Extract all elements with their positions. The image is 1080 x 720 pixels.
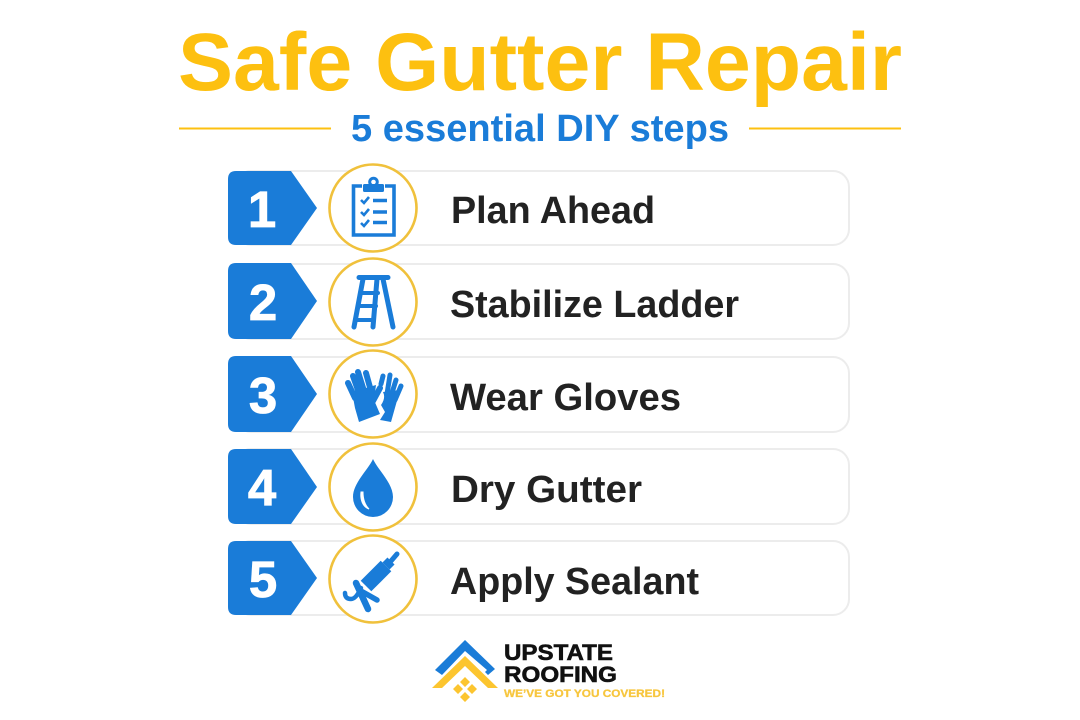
label: Apply Sealant <box>450 561 699 603</box>
step 5: apply sealant <box>228 536 849 622</box>
label: Stabilize Ladder <box>450 284 739 326</box>
logo text <box>504 640 665 700</box>
step 2: stabilize ladder <box>228 258 849 346</box>
icon: caulk gun <box>345 554 397 609</box>
logo text: UPSTATE <box>504 640 613 665</box>
step 3: wear gloves <box>228 350 849 438</box>
number badge 3: 3 <box>249 367 277 424</box>
label: Plan Ahead <box>451 190 655 232</box>
logo text: ROOFING <box>504 662 617 687</box>
icon: clipboard <box>354 178 394 235</box>
icon: ladder <box>354 278 393 327</box>
icon: gloves <box>348 372 401 422</box>
number badge 1: 1 <box>248 181 276 238</box>
step 4: dry gutter <box>228 444 849 530</box>
label: Wear Gloves <box>450 377 681 419</box>
logo: upstate roofing <box>432 640 665 702</box>
label: Dry Gutter <box>451 469 642 511</box>
number badge 2: 2 <box>249 274 277 331</box>
number badge 4: 4 <box>248 459 277 516</box>
number badge 3 <box>228 356 317 432</box>
number badge 5: 5 <box>249 551 277 608</box>
step 1: plan ahead <box>228 164 849 252</box>
subtitle: 5 essential DIY steps <box>351 108 729 150</box>
icon: water drop <box>353 459 393 517</box>
number badge 1 <box>228 171 317 245</box>
logo text: WE’VE GOT YOU COVERED! <box>504 688 665 700</box>
number badge 5 <box>228 541 317 615</box>
number badge 4 <box>228 449 317 524</box>
logo icon: roof <box>432 640 498 702</box>
title: Safe Gutter Repair <box>178 17 902 108</box>
number badge 2 <box>228 263 317 339</box>
